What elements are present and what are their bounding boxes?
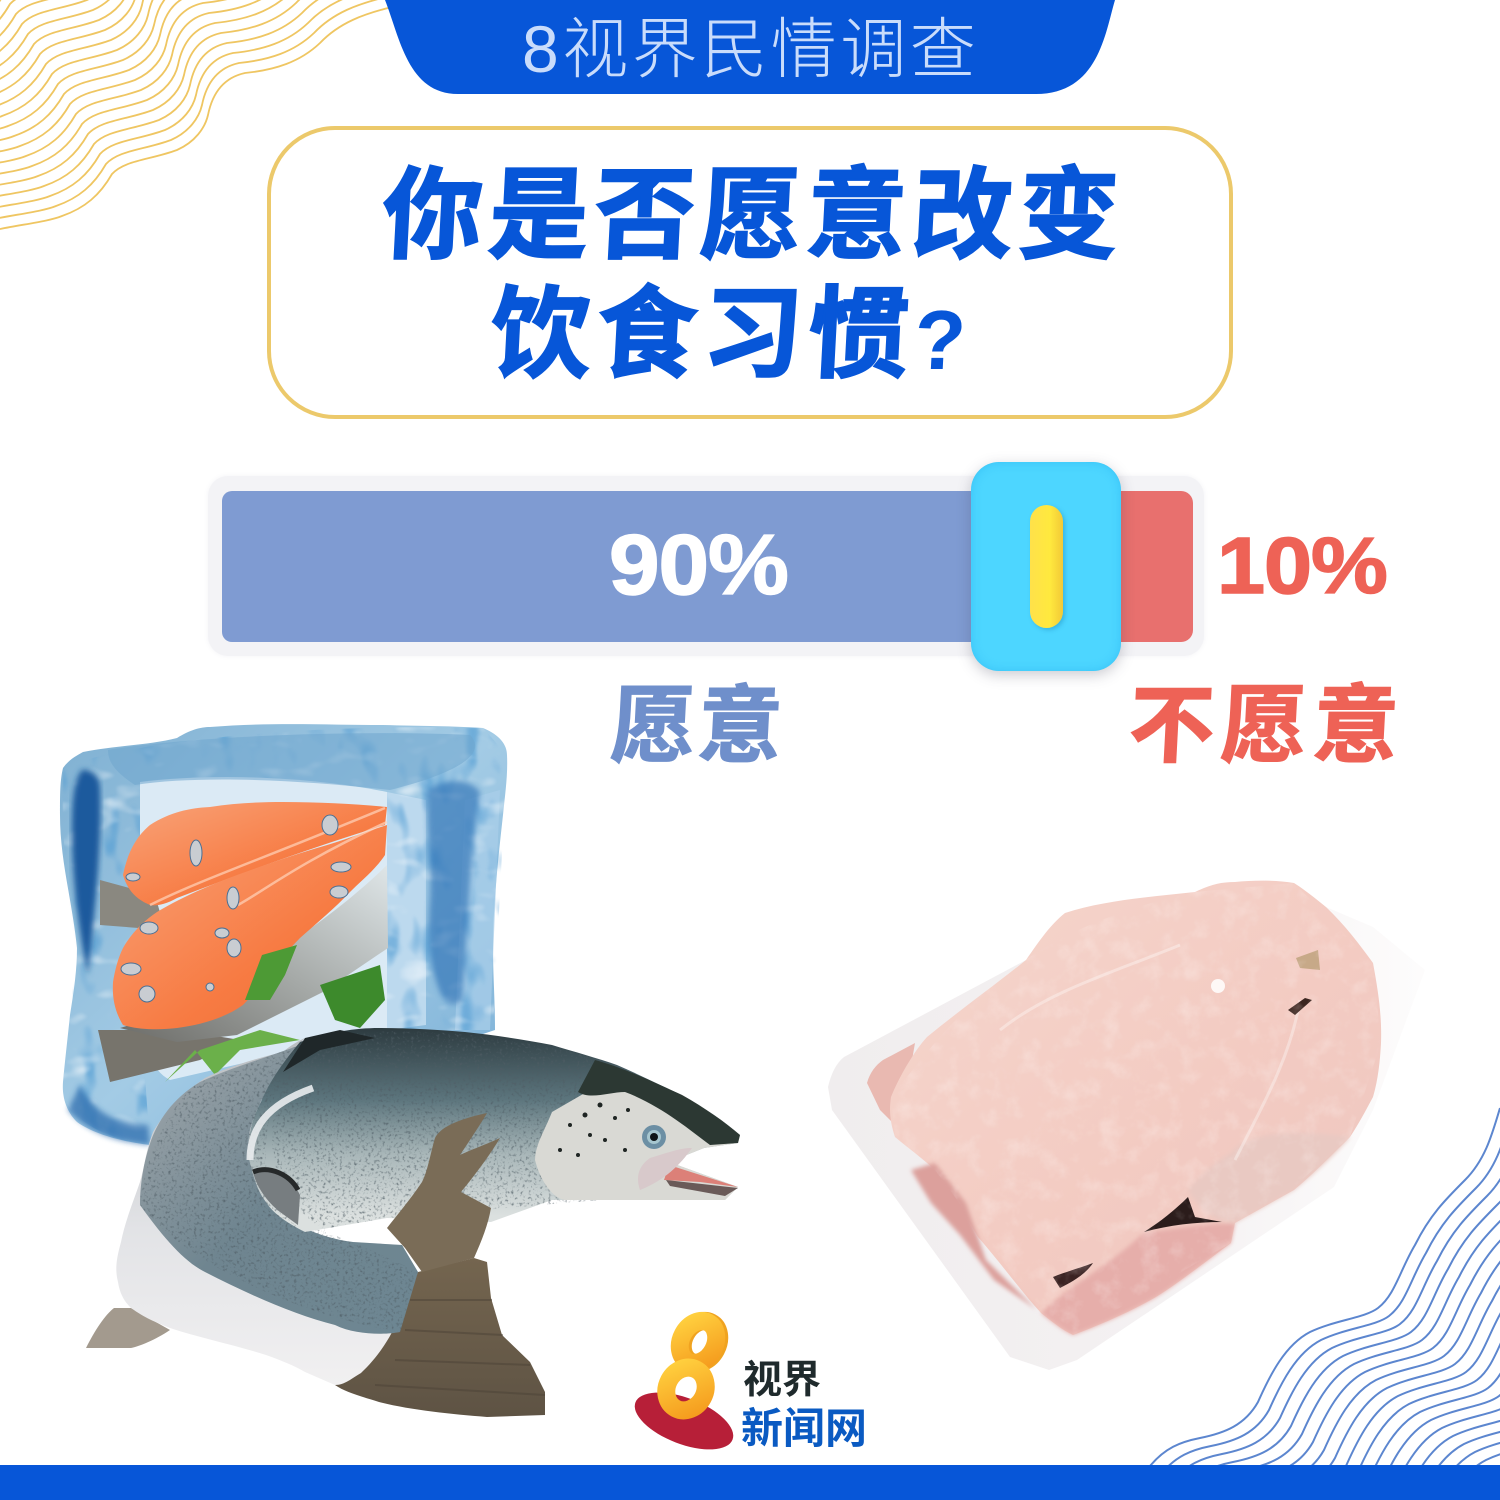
question line 2: 饮食习惯? bbox=[488, 279, 974, 391]
question line 1: 你是否愿意改变 bbox=[380, 160, 1128, 272]
value 10%: 10% bbox=[1217, 521, 1387, 610]
decorative gold wave lines bbox=[0, 0, 388, 230]
image: frozen chicken on tray bbox=[828, 880, 1382, 1370]
decorative blue wave lines bbox=[1150, 1108, 1500, 1465]
bar: 90 percent willing bbox=[222, 491, 992, 642]
header title: 8视界民情调查 bbox=[522, 12, 979, 86]
logo text: 新闻网: 新闻网 bbox=[741, 1405, 867, 1452]
label willing: 愿意 bbox=[609, 679, 788, 773]
logo emblem bbox=[634, 1312, 734, 1450]
pectoral fin bbox=[387, 1113, 500, 1272]
salmon steak bbox=[98, 802, 388, 1082]
image: frozen salmon steak in ice cube bbox=[60, 724, 508, 1149]
slider knob bbox=[971, 462, 1121, 671]
header tab bbox=[385, 0, 1115, 94]
bar: 10 percent unwilling bbox=[1100, 491, 1193, 642]
logo text: 视界: 视界 bbox=[743, 1359, 821, 1402]
value 90%: 90% bbox=[609, 518, 788, 613]
logo bbox=[634, 1312, 867, 1452]
tail fin bbox=[335, 1258, 545, 1417]
label unwilling: 不愿意 bbox=[1127, 679, 1408, 774]
head bbox=[535, 1087, 740, 1200]
knob yellow pill bbox=[1030, 505, 1063, 628]
bottom band bbox=[0, 1465, 1500, 1500]
question panel bbox=[267, 126, 1233, 419]
slider track halo bbox=[208, 476, 1204, 656]
image: whole salmon bbox=[86, 1028, 740, 1417]
